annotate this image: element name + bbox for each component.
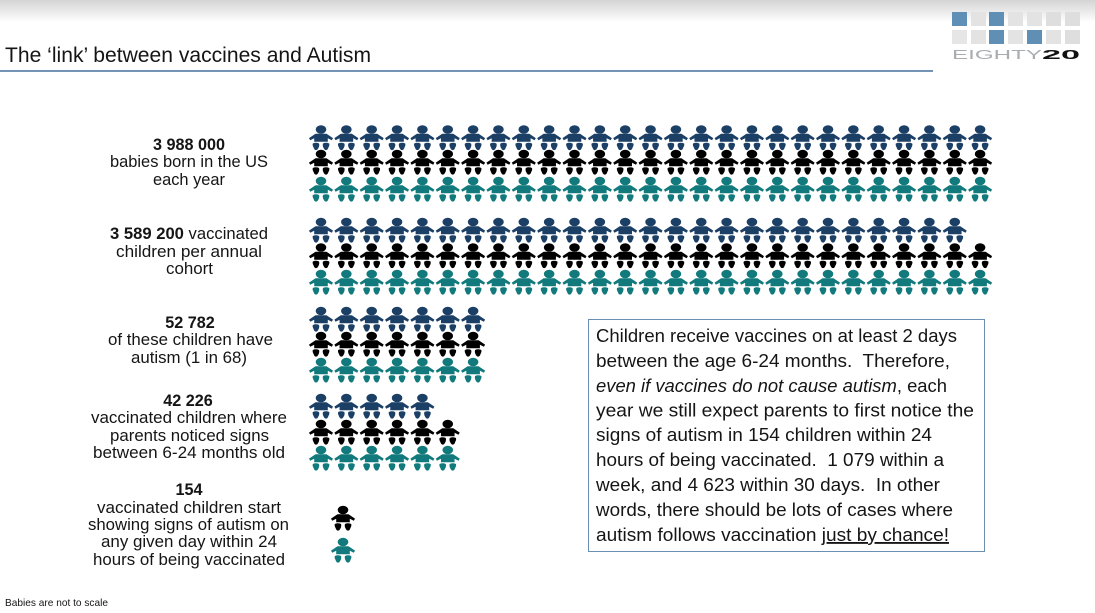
- label: children with autism: of these children have: [108, 331, 273, 349]
- label: signs noticed: between 6-24 months old: [93, 444, 285, 462]
- callout box: between the age 6-24 months. Therefore,: [596, 350, 950, 371]
- baby row: within 24 hours: [331, 506, 355, 563]
- callout box: autism follows vaccination just by chance!: [596, 524, 949, 545]
- label: children with autism: 52 782: [165, 314, 215, 332]
- title: The ‘link’ between vaccines and Autism: [5, 44, 371, 67]
- label: signs noticed: parents noticed signs: [110, 427, 269, 445]
- callout box: [588, 320, 984, 552]
- label: within 24 hours: [88, 481, 289, 569]
- callout box: hours of being vaccinated. 1 079 within a: [596, 449, 945, 470]
- label: vaccinated children: children per annual: [116, 243, 262, 261]
- label: babies born: 3 988 000: [153, 136, 225, 154]
- logo: Eighty20: 20: [1042, 47, 1080, 62]
- label: children with autism: [108, 314, 273, 367]
- callout box: words, there should be lots of cases where: [595, 499, 953, 520]
- label: signs noticed: vaccinated children where: [91, 409, 287, 427]
- baby row: babies born: [309, 125, 992, 202]
- label: vaccinated children: cohort: [166, 260, 214, 278]
- label: signs noticed: 42 226: [163, 392, 213, 410]
- baby row: signs noticed: [309, 394, 460, 471]
- label: vaccinated children: [110, 225, 268, 278]
- label: within 24 hours: vaccinated children start: [97, 499, 282, 517]
- label: babies born: [110, 136, 268, 189]
- callout box: year we still expect parents to first notice the: [596, 400, 974, 420]
- logo: Eighty20: [952, 12, 1080, 62]
- logo: Eighty20: EIGHTY: [952, 47, 1043, 62]
- label: within 24 hours: 154: [175, 481, 203, 499]
- label: vaccinated children: 3 589 200 vaccinated: [110, 225, 268, 243]
- callout box: even if vaccines do not cause autism, each: [596, 375, 947, 396]
- callout box: signs of autism in 154 children within 24: [596, 424, 932, 445]
- baby row: vaccinated children: [309, 218, 992, 295]
- label: babies born: babies born in the US: [110, 153, 268, 171]
- label: within 24 hours: showing signs of autism on: [88, 516, 289, 534]
- label: signs noticed: [91, 392, 287, 462]
- label: children with autism: autism (1 in 68): [131, 349, 247, 367]
- label: within 24 hours: hours of being vaccinated: [93, 551, 285, 569]
- footnote: Babies are not to scale: [5, 597, 108, 609]
- baby row: children with autism: [309, 307, 485, 383]
- callout box: Children receive vaccines on at least 2 days: [596, 325, 957, 346]
- label: within 24 hours: any given day within 24: [101, 533, 277, 551]
- label: babies born: each year: [153, 171, 226, 189]
- callout box: week, and 4 623 within 30 days. In other: [595, 474, 940, 495]
